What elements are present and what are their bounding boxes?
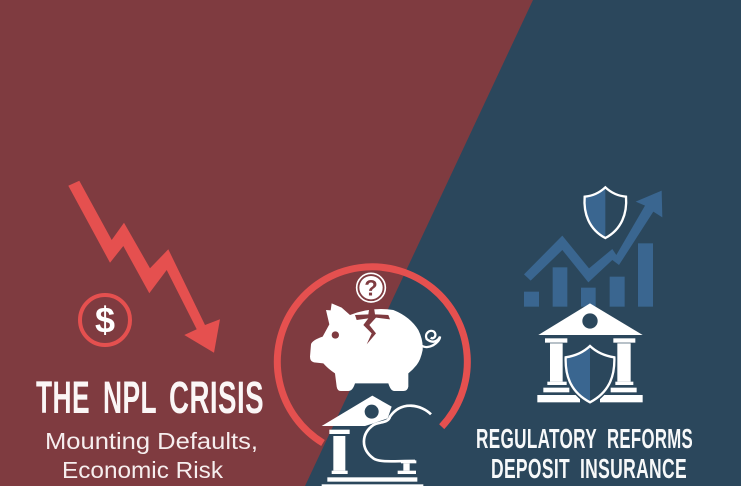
text: crisis subtitle: Economic Risk (62, 457, 223, 483)
icon: falling red arrow (68, 181, 220, 353)
pig body (310, 303, 423, 391)
bank roof (322, 396, 392, 426)
heading: the NPL crisis (36, 372, 264, 423)
icon: bank with shield (537, 303, 643, 406)
bank columns (545, 338, 567, 343)
heading: the NPL crisis: NPL (103, 372, 157, 423)
icon: red ring (277, 267, 467, 443)
text: reforms heading: REGULATORY (476, 423, 597, 454)
icon: dollar coin: $ (95, 300, 115, 340)
icon: cracked piggy bank (310, 273, 440, 391)
heading: the NPL crisis: CRISIS (169, 372, 264, 423)
bank columns (329, 430, 350, 434)
cloud outline (364, 406, 431, 461)
icon: bank with cloud (322, 396, 431, 486)
small shield (584, 187, 626, 238)
pig eye (332, 331, 339, 339)
crack (355, 308, 390, 344)
panel: reforms background (305, 0, 741, 486)
text: reforms heading (476, 423, 693, 484)
rising arrow (524, 191, 662, 282)
bank shield (563, 343, 617, 406)
icon: growth chart with shield (524, 187, 662, 307)
bank roof (538, 303, 643, 335)
chart bars (524, 243, 653, 307)
heading: the NPL crisis: THE (36, 372, 90, 423)
icon: dollar coin (80, 295, 130, 345)
text: crisis subtitle: Mounting Defaults, (45, 428, 258, 454)
question badge: ? (364, 276, 378, 301)
text: crisis subtitle (45, 428, 258, 483)
pig tail (421, 331, 440, 347)
text: reforms heading: DEPOSIT (491, 453, 570, 484)
